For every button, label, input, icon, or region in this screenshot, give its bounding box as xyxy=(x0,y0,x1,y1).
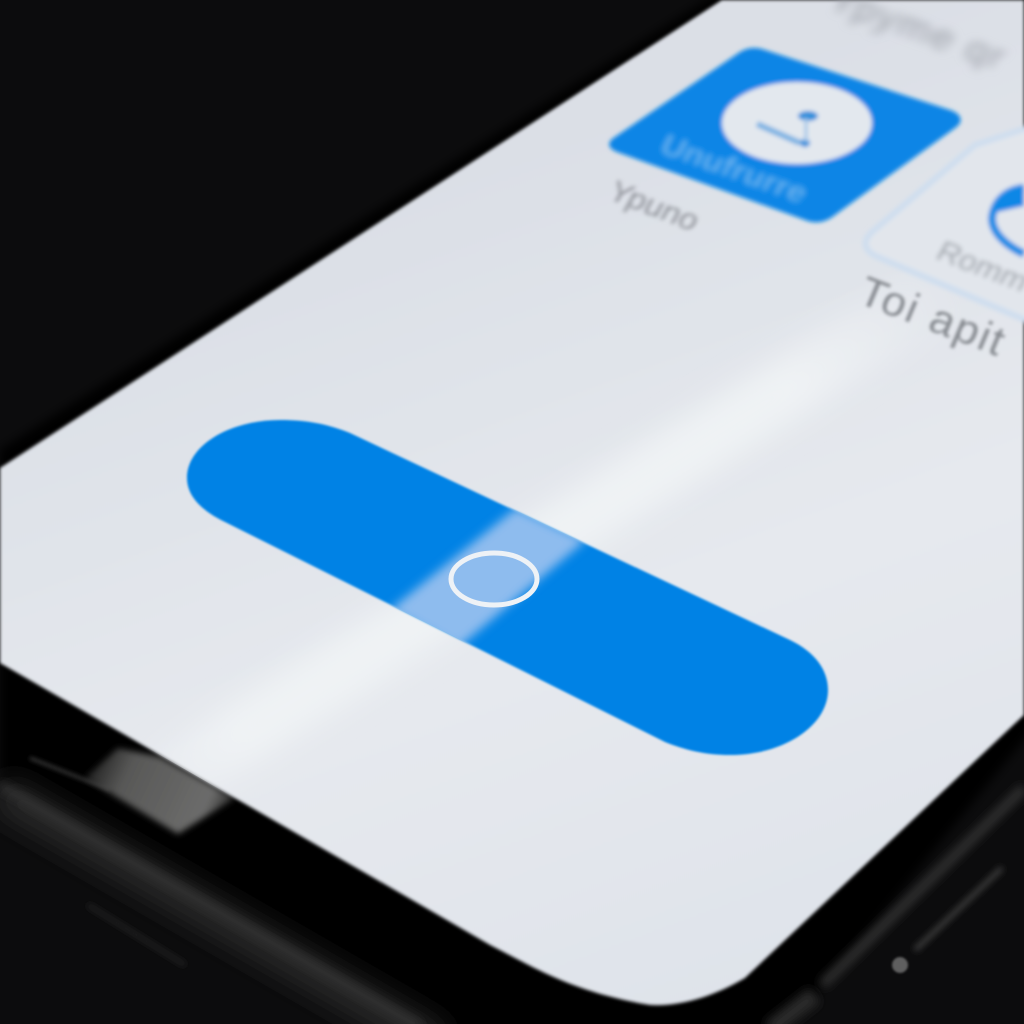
caption under blue tile: Ypuno xyxy=(603,174,706,237)
blue slider pill xyxy=(187,420,828,755)
phone body edge highlights xyxy=(0,758,1024,1024)
app tile: outlined xyxy=(865,127,1024,322)
slider ring handle xyxy=(451,553,537,605)
app tile: blue xyxy=(609,48,961,222)
outlined tile icon xyxy=(992,188,1024,254)
light streak across screen xyxy=(148,346,850,794)
tile icon circle xyxy=(722,82,872,164)
tile icon glyph xyxy=(757,111,818,147)
caption: Toi apit: Toi apit xyxy=(852,268,1014,366)
glass reflection on bezel xyxy=(85,748,235,834)
highlight band on pill xyxy=(390,508,586,648)
tile label: Unufrurre xyxy=(655,127,814,210)
